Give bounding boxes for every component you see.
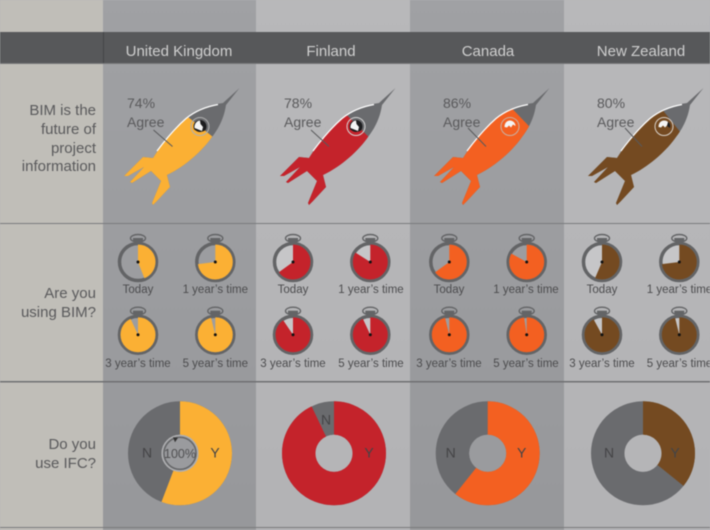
stopwatches: Finland [260, 234, 404, 370]
heading: Canada: Canada [462, 43, 515, 60]
label: Today: Today [123, 284, 154, 296]
label: 1 year's time: 1 year’s time [338, 284, 404, 296]
callout: 74% Agree: 74% [127, 95, 155, 111]
label: N: N [446, 444, 456, 460]
rocket: United Kingdom 74% [124, 88, 240, 205]
donut chart: New Zealand IFC [604, 418, 680, 489]
label: 1 year's time: 1 year’s time [183, 284, 248, 296]
stopwatch: Finland 5 years [352, 307, 389, 353]
label: 3 year's time: 3 year’s time [260, 358, 326, 370]
stopwatch: Finland 3 years [274, 307, 312, 353]
row label: BIM is the future of project information: BIM is the [29, 102, 96, 119]
stopwatch: Canada 1 year [508, 234, 545, 280]
header band [0, 32, 710, 64]
label: Y: Y [364, 444, 374, 460]
stopwatches: Canada [416, 234, 559, 370]
donut chart: Finland IFC [299, 411, 374, 489]
heading: New Zealand: New Zealand [597, 43, 685, 60]
column background: New Zealand [564, 0, 710, 530]
row label: BIM is the future of project information: project [51, 140, 97, 157]
stopwatch: Canada 3 years [431, 307, 468, 353]
stopwatch: NZ 1 year [661, 234, 698, 280]
stopwatch: Canada 5 years [508, 307, 545, 353]
row label: Are you using BIM?: Are you [44, 285, 96, 302]
label: Y: Y [210, 444, 220, 460]
column background: Finland [256, 0, 410, 530]
rocket: New Zealand 80% [588, 88, 704, 205]
row label: Do you use IFC?: use IFC? [35, 455, 96, 472]
callout: 78% Agree: Agree [284, 114, 322, 130]
stopwatch: Finland 1 year [352, 234, 389, 280]
callout: 80% Agree: Agree [597, 114, 635, 130]
row label: BIM is the future of project information: information [22, 158, 96, 175]
heading: United Kingdom: United Kingdom [126, 43, 232, 60]
stopwatch: NZ 3 years [584, 307, 620, 353]
label: 5 year's time: 5 year’s time [493, 358, 559, 370]
label: 5 year's time: 5 year’s time [338, 358, 404, 370]
label: N: N [604, 444, 614, 460]
stopwatch: Canada today [431, 234, 468, 280]
callout: 74% Agree: Agree [127, 114, 165, 130]
heading: Finland: Finland [306, 43, 356, 60]
label: 5 year's time: 5 year’s time [183, 358, 248, 370]
stopwatch: UK 5 years [197, 307, 234, 353]
label: 100%: 100% [164, 447, 196, 461]
stopwatches: New Zealand [569, 234, 710, 370]
rocket: Finland 78% [280, 88, 396, 205]
label: Y: Y [517, 444, 527, 460]
callout: 78% Agree: 78% [284, 95, 312, 111]
stopwatches: United Kingdom [105, 234, 248, 370]
donut chart: Canada IFC [446, 418, 527, 489]
label: N: N [142, 444, 152, 460]
callout: 80% Agree: 80% [597, 95, 625, 111]
stopwatch: Finland today [274, 234, 312, 280]
donut chart: United Kingdom IFC [142, 418, 220, 489]
label: Today: Today [278, 284, 309, 296]
stopwatch: UK 3 years [120, 307, 156, 353]
stopwatch: NZ 5 years [661, 307, 698, 353]
label: Y: Y [670, 444, 680, 460]
stopwatch: UK 1 year [197, 234, 234, 280]
row label: Are you using BIM?: using BIM? [21, 304, 96, 321]
callout: 86% Agree: Agree [443, 114, 481, 130]
column background: Canada [410, 0, 564, 530]
label: 3 year's time: 3 year’s time [569, 358, 635, 370]
label: 1 year's time: 1 year’s time [493, 284, 559, 296]
label column background [0, 0, 103, 530]
label: N: N [321, 411, 331, 427]
label: Today: Today [587, 284, 618, 296]
rocket: Canada 86% [434, 88, 550, 205]
stopwatch: NZ today [584, 234, 620, 280]
stopwatch: UK today [120, 234, 156, 280]
column background: United Kingdom [103, 0, 256, 530]
callout: 86% Agree: 86% [443, 95, 471, 111]
row label: Do you use IFC?: Do you [48, 436, 96, 453]
label: 3 year's time: 3 year’s time [105, 358, 171, 370]
label: 3 year's time: 3 year’s time [416, 358, 482, 370]
label: Today: Today [434, 284, 465, 296]
row label: BIM is the future of project information: future of [41, 121, 97, 138]
